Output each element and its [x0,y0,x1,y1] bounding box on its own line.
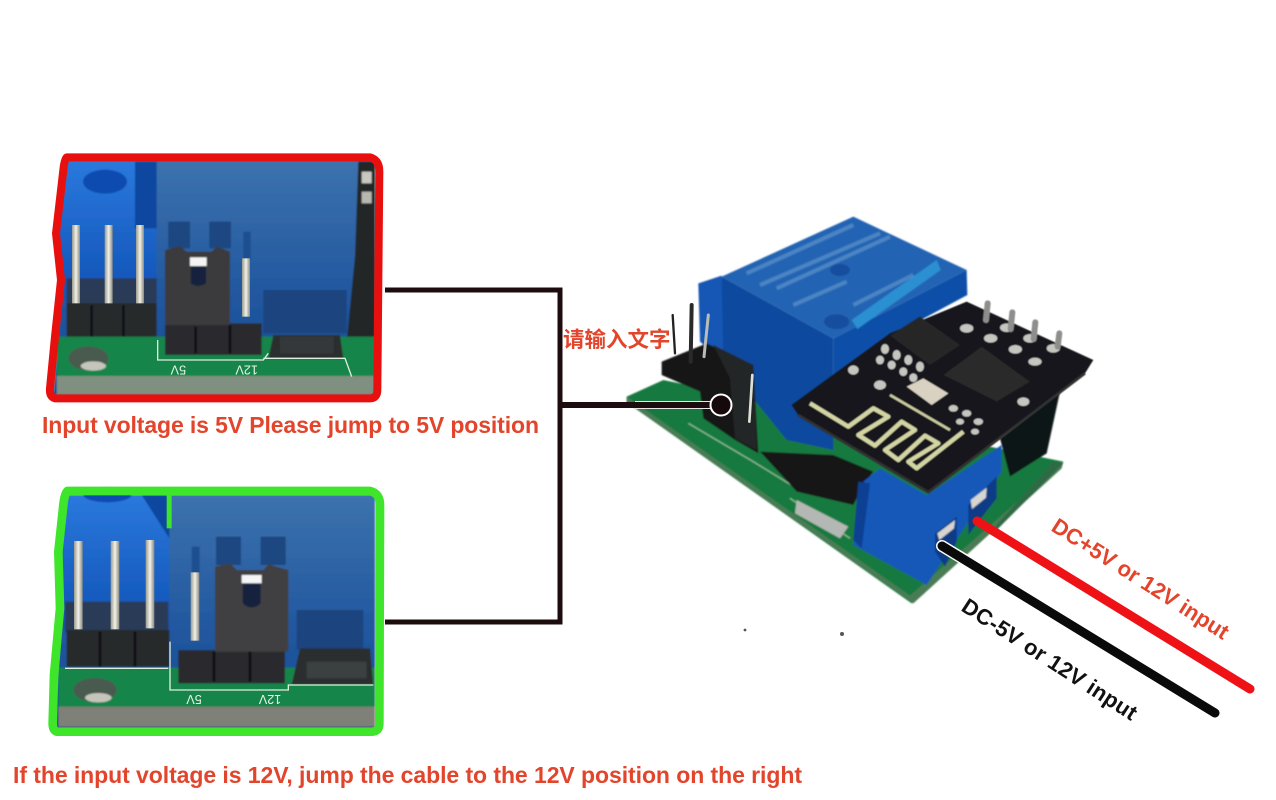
red outline [50,157,379,398]
relay top [722,217,967,338]
red input wire [977,521,1250,689]
bracket connector lines [385,290,722,622]
relay front faces [722,277,833,450]
crystal [907,378,948,405]
ESP-01 wifi module [792,302,1093,492]
green outline [53,491,380,732]
jumper pins [72,225,250,317]
panel: 12V jumper photo with green outline [53,488,380,732]
header and jumper [662,343,758,453]
relay module photo [627,217,1093,603]
front terminal block [853,445,1002,585]
header pins [673,305,752,422]
solder pads [848,323,1060,435]
caption: 12V instruction: If the input voltage is 12V, jump the cable to the 12V position on the right [13,762,802,788]
PCB and relay body [627,217,1063,603]
dark components under module [760,452,873,505]
board labels: 12V [235,362,258,376]
jumper pins [74,540,199,641]
wire label: negative: DC-5V or 12V input [957,593,1143,726]
board labels [65,642,373,706]
back blue terminal [698,276,727,365]
board labels: 5V [186,692,202,706]
ESP8266 chip [943,347,1030,402]
flash chip [890,317,960,365]
photo: 5V jumper position [53,160,375,395]
placeholder label: 请输入文字 [563,327,671,352]
board labels: 12V [258,692,281,706]
top pins [986,303,1059,347]
caption: 5V instruction: Input voltage is 5V Please jump to 5V position [42,412,539,438]
wifi antenna trace [810,403,963,468]
black input wire [942,546,1215,713]
panel: 5V jumper photo with red outline [50,157,379,398]
wire label: positive: DC+5V or 12V input [1047,513,1234,645]
connector end dot [710,394,732,416]
green divider tick [167,495,172,528]
photo: 12V jumper position [53,488,375,730]
board labels: 5V [170,362,186,376]
speck marks [744,629,844,636]
board labels [158,340,352,377]
